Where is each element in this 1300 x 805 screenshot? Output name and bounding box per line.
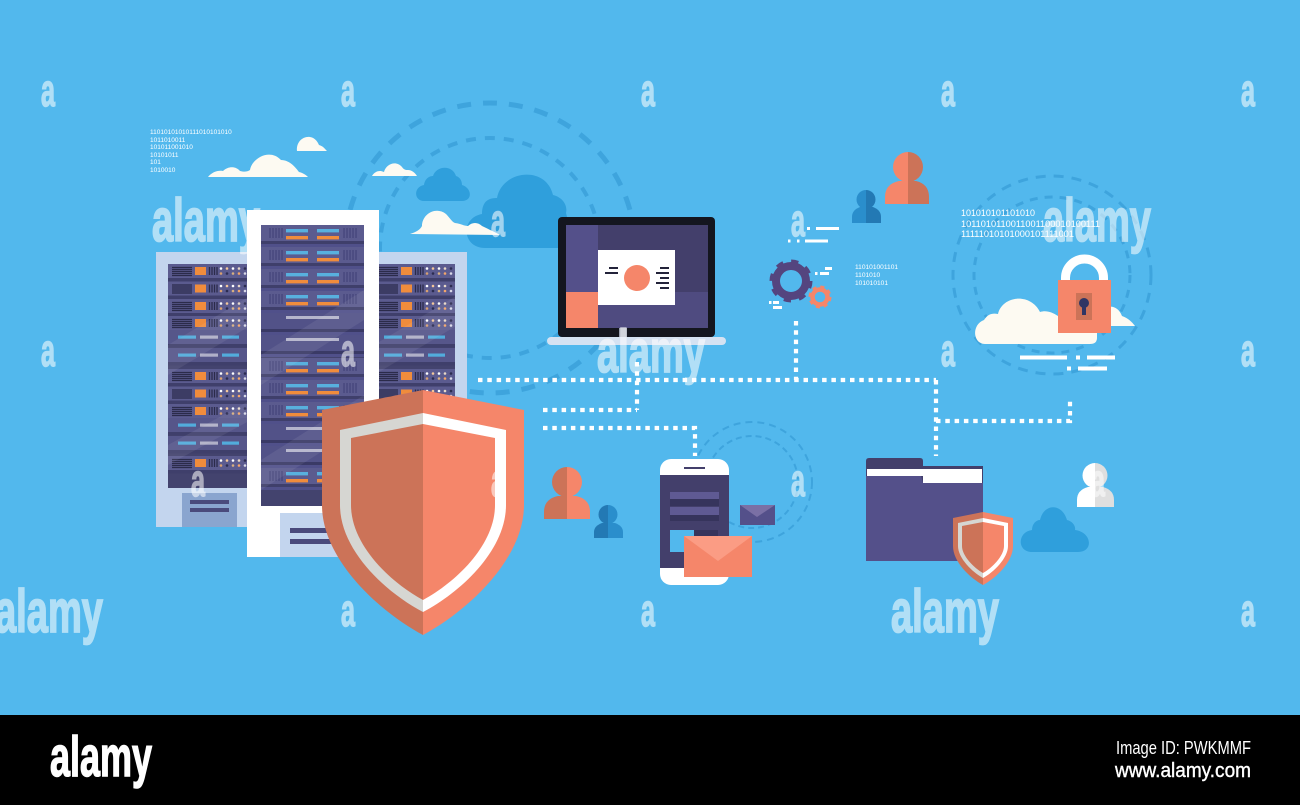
white cloud near laptop — [410, 211, 500, 235]
binary text: near gears: 1101010 — [855, 272, 881, 279]
large alamy marks: alamy — [152, 187, 260, 254]
small envelope — [740, 505, 775, 525]
lock data dashes — [1020, 358, 1115, 368]
small a marks: a — [791, 195, 806, 246]
binary text: top left: 101 — [150, 159, 161, 166]
laptop — [547, 217, 726, 345]
small a marks: a — [941, 65, 956, 116]
binary text: lock: 11111010101000101111001 — [961, 229, 1074, 239]
binary text: lock: 101010101101010 — [961, 208, 1035, 218]
gears — [772, 262, 830, 307]
website: www.alamy.com — [1114, 760, 1251, 782]
server rack: center — [247, 210, 379, 557]
left rack foot — [182, 493, 237, 527]
lock body — [1058, 280, 1111, 333]
small gear — [810, 287, 830, 307]
binary text: near gears: 101010101 — [855, 280, 888, 287]
small a marks: a — [341, 325, 356, 376]
small a marks: a — [1241, 65, 1256, 116]
person: blue bottom — [594, 505, 623, 538]
center rack foot — [280, 513, 350, 557]
binary text: near gears — [855, 264, 898, 287]
binary text: top left: 11010101010111010101010 — [150, 129, 232, 136]
binary text: near gears: 110101001101 — [855, 264, 898, 271]
person: blue top — [852, 190, 881, 223]
binary text: lock: 1011010110011001100010100111 — [961, 219, 1100, 229]
small a marks: a — [491, 455, 506, 506]
large shield — [322, 390, 524, 635]
left rack units — [168, 264, 247, 488]
large alamy marks — [0, 187, 1151, 645]
small a marks: a — [1241, 585, 1256, 636]
small a marks: a — [1091, 455, 1106, 506]
person: orange top — [885, 152, 929, 204]
binary text: top left — [150, 129, 232, 174]
binary text: lock — [961, 208, 1100, 239]
server rack: left and right — [156, 252, 467, 527]
small cloud — [1100, 307, 1135, 326]
alamy logo: alamy — [50, 725, 152, 789]
watermarks — [0, 65, 1256, 645]
binary text: top left: 10101011 — [150, 152, 179, 159]
image id: Image ID: PWKMMF — [1116, 738, 1251, 758]
bottom credit bar — [0, 715, 1300, 805]
small a marks: a — [941, 325, 956, 376]
binary text: top left: 101011001010 — [150, 144, 193, 151]
small a marks: a — [641, 65, 656, 116]
small a marks: a — [641, 585, 656, 636]
dashed circles around lock — [953, 176, 1151, 374]
keyhole — [1076, 293, 1092, 320]
center rack units — [261, 225, 364, 506]
large alamy marks: alamy — [597, 318, 705, 385]
dashed circles behind laptop — [345, 103, 635, 393]
small a marks — [41, 65, 1256, 636]
big cloud — [975, 299, 1097, 344]
small a marks: a — [341, 65, 356, 116]
large alamy marks: alamy — [0, 578, 103, 645]
small a marks: a — [41, 65, 56, 116]
large envelope — [684, 536, 752, 577]
dashed circles around phone — [692, 422, 812, 542]
binary text: top left: 1011010011 — [150, 137, 186, 144]
small a marks: a — [191, 455, 206, 506]
large alamy marks: alamy — [1043, 187, 1151, 254]
binary text: top left: 1010010 — [150, 167, 176, 174]
small a marks: a — [791, 455, 806, 506]
small a marks: a — [41, 325, 56, 376]
person: white — [1077, 463, 1114, 507]
white clouds: top left — [208, 137, 417, 177]
smartphone — [660, 459, 729, 585]
small a marks: a — [1241, 325, 1256, 376]
small data dashes — [769, 228, 839, 308]
small a marks: a — [491, 195, 506, 246]
dotted connector lines — [478, 321, 1070, 456]
blue cloud bottom right — [1021, 507, 1089, 552]
right rack units — [379, 264, 455, 399]
folder — [866, 458, 983, 561]
cloud and padlock — [975, 259, 1135, 344]
small shield — [953, 512, 1013, 585]
person: orange bottom — [544, 467, 590, 519]
shackle — [1066, 259, 1104, 282]
large alamy marks: alamy — [891, 578, 999, 645]
blue clouds behind laptop — [416, 168, 575, 248]
large gear — [772, 262, 810, 300]
small a marks: a — [341, 585, 356, 636]
rack cabinet — [156, 252, 467, 527]
